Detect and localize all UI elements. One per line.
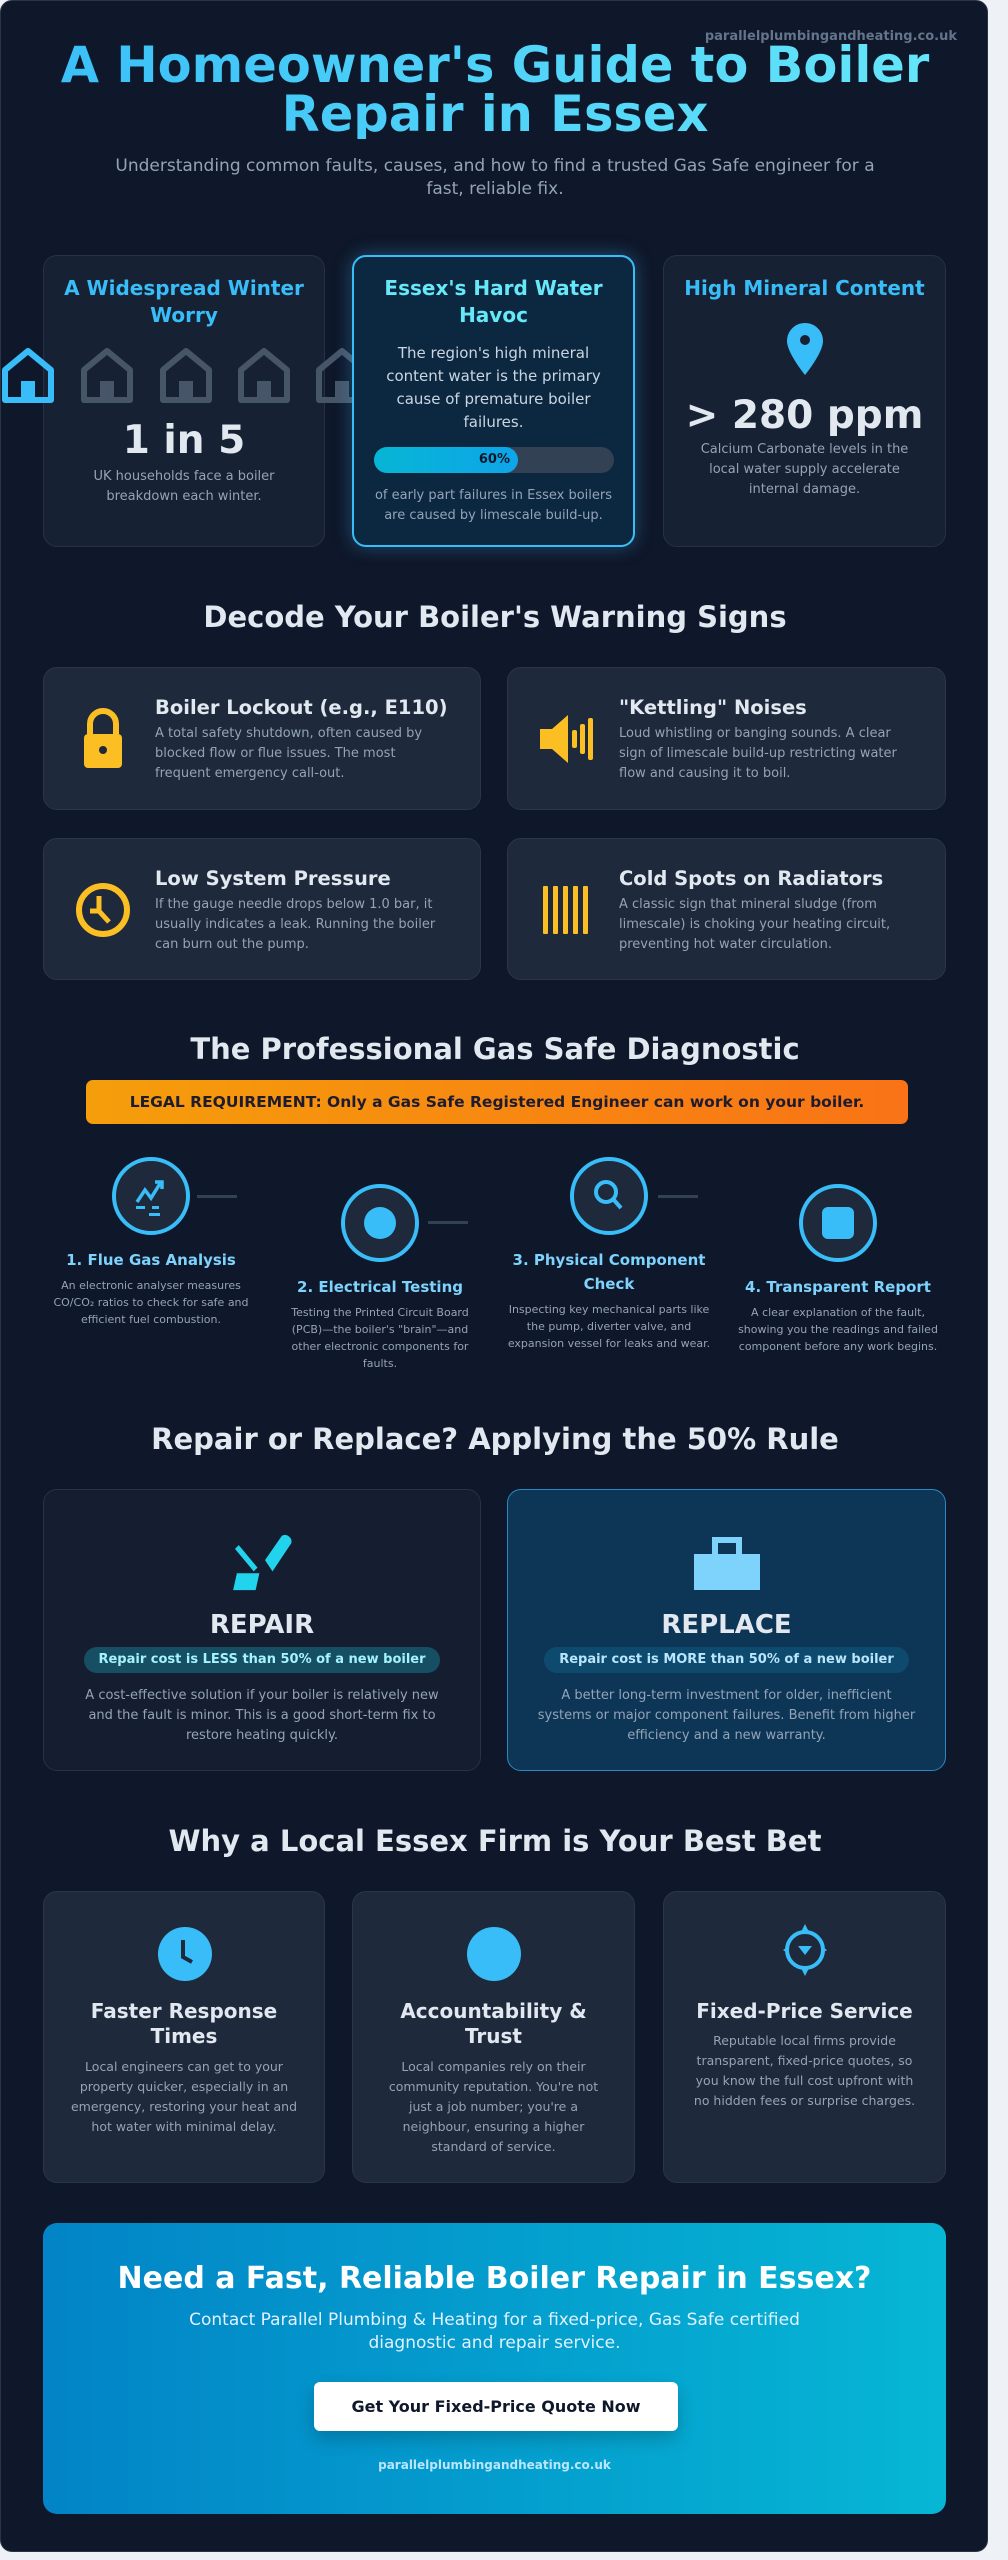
heading: winter worry <box>64 276 304 327</box>
text: replace desc: A better long-term investment for older, inefficient systems or major component failures. Benefit from higher efficiency and a new warranty. <box>538 1688 915 1743</box>
panel: mineral content <box>663 255 946 547</box>
panel: low pressure <box>43 838 481 980</box>
title <box>1 41 989 139</box>
panel: repair <box>43 1489 481 1771</box>
heading: local firm: Why a Local Essex Firm is Your Best Bet <box>169 1824 821 1858</box>
icon: target <box>783 1924 827 1976</box>
callout: legal requirement: LEGAL REQUIREMENT: Only a Gas Safe Registered Engineer can work on your boiler. <box>130 1093 864 1111</box>
step 4: report <box>738 1184 938 1353</box>
step 3: physical <box>508 1157 710 1350</box>
icon: map pin <box>787 323 823 375</box>
button: quote <box>314 2382 678 2431</box>
watermark url: parallelplumbingandheating.co.uk <box>705 29 957 44</box>
icon: speaker <box>540 715 593 763</box>
text: step 4 <box>738 1278 938 1353</box>
text: accountability: Accountability & Trust <box>400 1999 587 2048</box>
heading: hard water: Havoc <box>459 303 528 327</box>
text: cta url: parallelplumbingandheating.co.uk <box>378 2458 611 2472</box>
panel: kettling <box>507 667 946 810</box>
arrow: connector 2 <box>428 1221 468 1224</box>
subtitle: Understanding common faults, causes, and how to find a trusted Gas Safe engineer for a fast, reliable fix. <box>115 156 875 199</box>
icon: circle <box>467 1927 521 1981</box>
heading: warning signs: Decode Your Boiler's Warning Signs <box>203 600 787 634</box>
text: lockout: A total safety shutdown, often caused by blocked flow or flue issues. The most frequent emergency call-out. <box>155 726 422 781</box>
heading: diagnostic: The Professional Gas Safe Diagnostic <box>190 1032 800 1066</box>
text: lockout: Boiler Lockout (e.g., E110) <box>155 696 448 719</box>
text: pressure: Low System Pressure <box>155 867 391 890</box>
text: step 2: 2. Electrical Testing <box>297 1278 463 1296</box>
text: step 4: A clear explanation of the fault, showing you the readings and failed component before any work begins. <box>738 1306 938 1353</box>
heading: hard water <box>384 276 603 327</box>
step 2: electrical <box>291 1184 469 1370</box>
chart: progress bar 60%: 60% <box>479 452 510 467</box>
panel: cold spots <box>507 838 946 980</box>
heading: winter worry: Worry <box>150 303 218 327</box>
icon: toolbox <box>694 1537 760 1590</box>
icon: clock <box>158 1927 212 1981</box>
icon: houses <box>2 348 352 403</box>
heading: winter worry: A Widespread Winter <box>64 276 304 300</box>
title: A Homeowner's Guide to Boiler <box>61 36 929 94</box>
text: cold spots <box>619 867 890 952</box>
text: pressure: If the gauge needle drops below 1.0 bar, it usually indicates a leak. Running the boiler can burn out the pump. <box>155 897 435 952</box>
text: cold spots: Cold Spots on Radiators <box>619 867 883 890</box>
text: kettling: Loud whistling or banging sounds. A clear sign of limescale build-up restricting water flow and causing it to boil. <box>619 726 897 781</box>
panel: stat winter worry <box>43 255 325 547</box>
text: accountability desc: Local companies rely on their community reputation. You're not just a job number; you're a neighbour, ensuring a higher standard of service. <box>389 2059 598 2154</box>
text: step 3: 3. Physical Component Check <box>513 1251 705 1293</box>
icon: wrench <box>233 1534 292 1590</box>
panel: faster response <box>43 1891 325 2183</box>
pill: less than 50%: Repair cost is LESS than 50% of a new boiler <box>98 1652 426 1667</box>
icon: padlock <box>84 708 122 768</box>
text: fixed desc: Reputable local firms provide transparent, fixed-price quotes, so you know the full cost upfront with no hidden fees or surprise charges. <box>694 2033 915 2108</box>
icon: dot circle <box>341 1184 419 1262</box>
icon: square circle <box>799 1184 877 1262</box>
arrow: connector 1 <box>197 1195 237 1198</box>
icon: gauge <box>76 883 130 937</box>
panel: call to action <box>43 2223 946 2514</box>
text: step 1: 1. Flue Gas Analysis <box>66 1251 236 1269</box>
text: early failures: of early part failures in Essex boilers are caused by limescale build-up. <box>375 488 612 523</box>
text: step 1 <box>53 1251 249 1326</box>
button: quote: Get Your Fixed-Price Quote Now <box>351 2397 641 2416</box>
icon: radiator <box>543 886 588 934</box>
chart: progress bar 60% <box>374 447 614 473</box>
text: step 3 <box>508 1251 710 1350</box>
callout: legal requirement <box>86 1080 908 1124</box>
text: kettling <box>619 696 897 781</box>
text: fixed price: Fixed-Price Service <box>696 1999 913 2023</box>
panel: accountability <box>352 1891 635 2183</box>
pill: more than 50%: Repair cost is MORE than 50% of a new boiler <box>559 1652 894 1667</box>
pill: more than 50% <box>544 1647 909 1673</box>
text: step 3: Inspecting key mechanical parts like the pump, diverter valve, and expansion vessel for leaks and wear. <box>508 1303 710 1350</box>
heading: hard water: Essex's Hard Water <box>384 276 603 300</box>
heading: cta: Need a Fast, Reliable Boiler Repair in Essex? <box>118 2261 871 2296</box>
label: REPAIR: REPAIR <box>210 1610 314 1640</box>
stat: 1 in 5: 1 in 5 <box>123 418 245 463</box>
arrow: connector 3 <box>658 1195 698 1198</box>
text: faster: Faster Response Times <box>91 1999 277 2048</box>
label: REPLACE: REPLACE <box>661 1610 792 1640</box>
text: kettling: "Kettling" Noises <box>619 696 807 719</box>
text: repair desc: A cost-effective solution if your boiler is relatively new and the fault is minor. This is a good short-term fix to restore heating quickly. <box>85 1688 439 1743</box>
icon: chart circle <box>112 1157 190 1235</box>
title: Repair in Essex <box>282 85 708 143</box>
heading: mineral: High Mineral Content <box>684 276 925 300</box>
text: calcium: Calcium Carbonate levels in the local water supply accelerate internal damage. <box>701 442 908 497</box>
step 1: flue gas <box>53 1157 249 1326</box>
pill: less than 50% <box>84 1647 440 1673</box>
panel: hard water havoc <box>352 255 635 547</box>
text: lockout <box>155 696 448 781</box>
text: pressure <box>155 867 436 952</box>
text: faster desc: Local engineers can get to your property quicker, especially in an emergency, restoring your heat and hot water with minimal delay. <box>71 2059 297 2134</box>
panel: fixed price <box>663 1891 946 2183</box>
text: step 1: An electronic analyser measures CO/CO₂ ratios to check for safe and efficient fuel combustion. <box>53 1279 249 1326</box>
text: region: The region's high mineral content water is the primary cause of premature boiler failures. <box>386 344 601 431</box>
text: households: UK households face a boiler breakdown each winter. <box>93 469 275 504</box>
text: cold spots: A classic sign that mineral sludge (from limescale) is choking your heating circuit, preventing hot water circulation. <box>619 897 890 952</box>
icon: magnifier circle <box>570 1157 648 1235</box>
panel: boiler lockout <box>43 667 481 810</box>
text: cta sub: Contact Parallel Plumbing & Heating for a fixed-price, Gas Safe certified diagnostic and repair service. <box>189 2310 800 2353</box>
text: step 2 <box>291 1278 469 1370</box>
panel: replace <box>507 1489 946 1771</box>
stat: 280 ppm: > 280 ppm <box>686 393 923 438</box>
text: step 2: Testing the Printed Circuit Board (PCB)—the boiler's "brain"—and other electronic components for faults. <box>291 1306 469 1370</box>
text: step 4: 4. Transparent Report <box>745 1278 931 1296</box>
heading: repair or replace: Repair or Replace? Applying the 50% Rule <box>151 1422 839 1456</box>
